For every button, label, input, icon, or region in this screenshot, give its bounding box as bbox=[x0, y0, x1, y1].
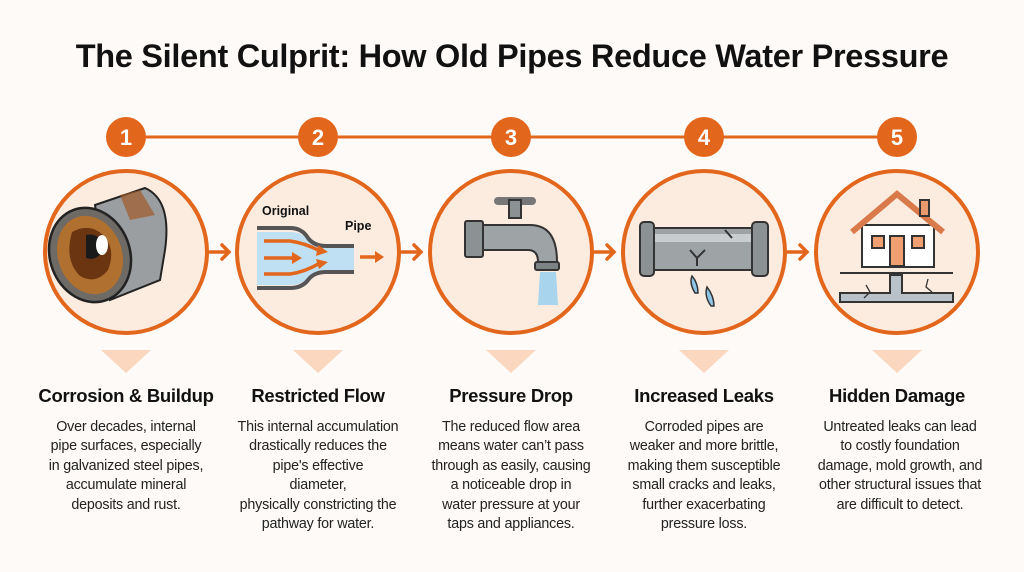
text 1: in galvanized steel pipes, bbox=[49, 458, 203, 474]
text 5: are difficult to detect. bbox=[837, 497, 963, 513]
text 4: making them susceptible bbox=[628, 458, 780, 474]
text 2: This internal accumulation bbox=[238, 419, 398, 435]
icon: restricted flow diagram: Original bbox=[262, 204, 309, 218]
icon: restricted flow diagram bbox=[257, 204, 384, 288]
title: The Silent Culprit: How Old Pipes Reduce Water Pressure bbox=[76, 38, 948, 74]
text 4: small cracks and leaks, bbox=[632, 477, 776, 493]
text 5: Untreated leaks can lead bbox=[823, 419, 977, 435]
text 1: pipe surfaces, especially bbox=[51, 438, 201, 454]
heading 1: Corrosion & Buildup bbox=[38, 385, 214, 406]
text 1: accumulate mineral bbox=[66, 477, 186, 493]
text 4 bbox=[628, 419, 780, 532]
heading 2: Restricted Flow bbox=[251, 385, 385, 406]
text 3: water pressure at your bbox=[442, 497, 580, 513]
arrows between circles bbox=[210, 245, 807, 259]
triangles bbox=[101, 350, 922, 373]
text 4: Corroded pipes are bbox=[645, 419, 763, 435]
text 3: The reduced flow area bbox=[442, 419, 580, 435]
heading 5: Hidden Damage bbox=[829, 385, 965, 406]
icon: faucet bbox=[465, 200, 559, 305]
text 2: physically constricting the bbox=[240, 497, 396, 513]
timeline line bbox=[126, 136, 897, 138]
text 1: Over decades, internal bbox=[56, 419, 196, 435]
step numbers: 5 bbox=[891, 125, 903, 150]
text 4: pressure loss. bbox=[661, 516, 747, 532]
text 2 bbox=[238, 419, 398, 532]
text 4: further exacerbating bbox=[642, 497, 766, 513]
text 1: deposits and rust. bbox=[71, 497, 181, 513]
text 5: other structural issues that bbox=[819, 477, 981, 493]
text 5 bbox=[818, 419, 982, 513]
icon: corroded pipe bbox=[36, 188, 166, 314]
text 1 bbox=[49, 419, 203, 513]
step numbers: 1 bbox=[120, 125, 132, 150]
icon: restricted flow diagram: Pipe bbox=[345, 219, 371, 233]
text 3 bbox=[431, 419, 591, 532]
text 3: means water can’t pass bbox=[438, 438, 584, 454]
step numbers: 2 bbox=[312, 125, 324, 150]
text 5: to costly foundation bbox=[840, 438, 960, 454]
text 3: through as easily, causing bbox=[431, 458, 591, 474]
icon: leaking pipe bbox=[640, 222, 768, 306]
heading 4: Increased Leaks bbox=[634, 385, 774, 406]
circles bbox=[45, 171, 978, 333]
step numbers: 4 bbox=[698, 125, 711, 150]
text 3: a noticeable drop in bbox=[451, 477, 571, 493]
step numbers bbox=[106, 117, 917, 157]
text 2: diameter, bbox=[289, 477, 346, 493]
text 3: taps and appliances. bbox=[447, 516, 575, 532]
text 2: drastically reduces the bbox=[249, 438, 387, 454]
step numbers: 3 bbox=[505, 125, 517, 150]
heading 3: Pressure Drop bbox=[449, 385, 573, 406]
text 2: pipe's effective bbox=[273, 458, 363, 474]
text 2: pathway for water. bbox=[262, 516, 374, 532]
icon: house damage bbox=[840, 194, 953, 302]
text 4: weaker and more brittle, bbox=[630, 438, 778, 454]
text 5: damage, mold growth, and bbox=[818, 458, 982, 474]
